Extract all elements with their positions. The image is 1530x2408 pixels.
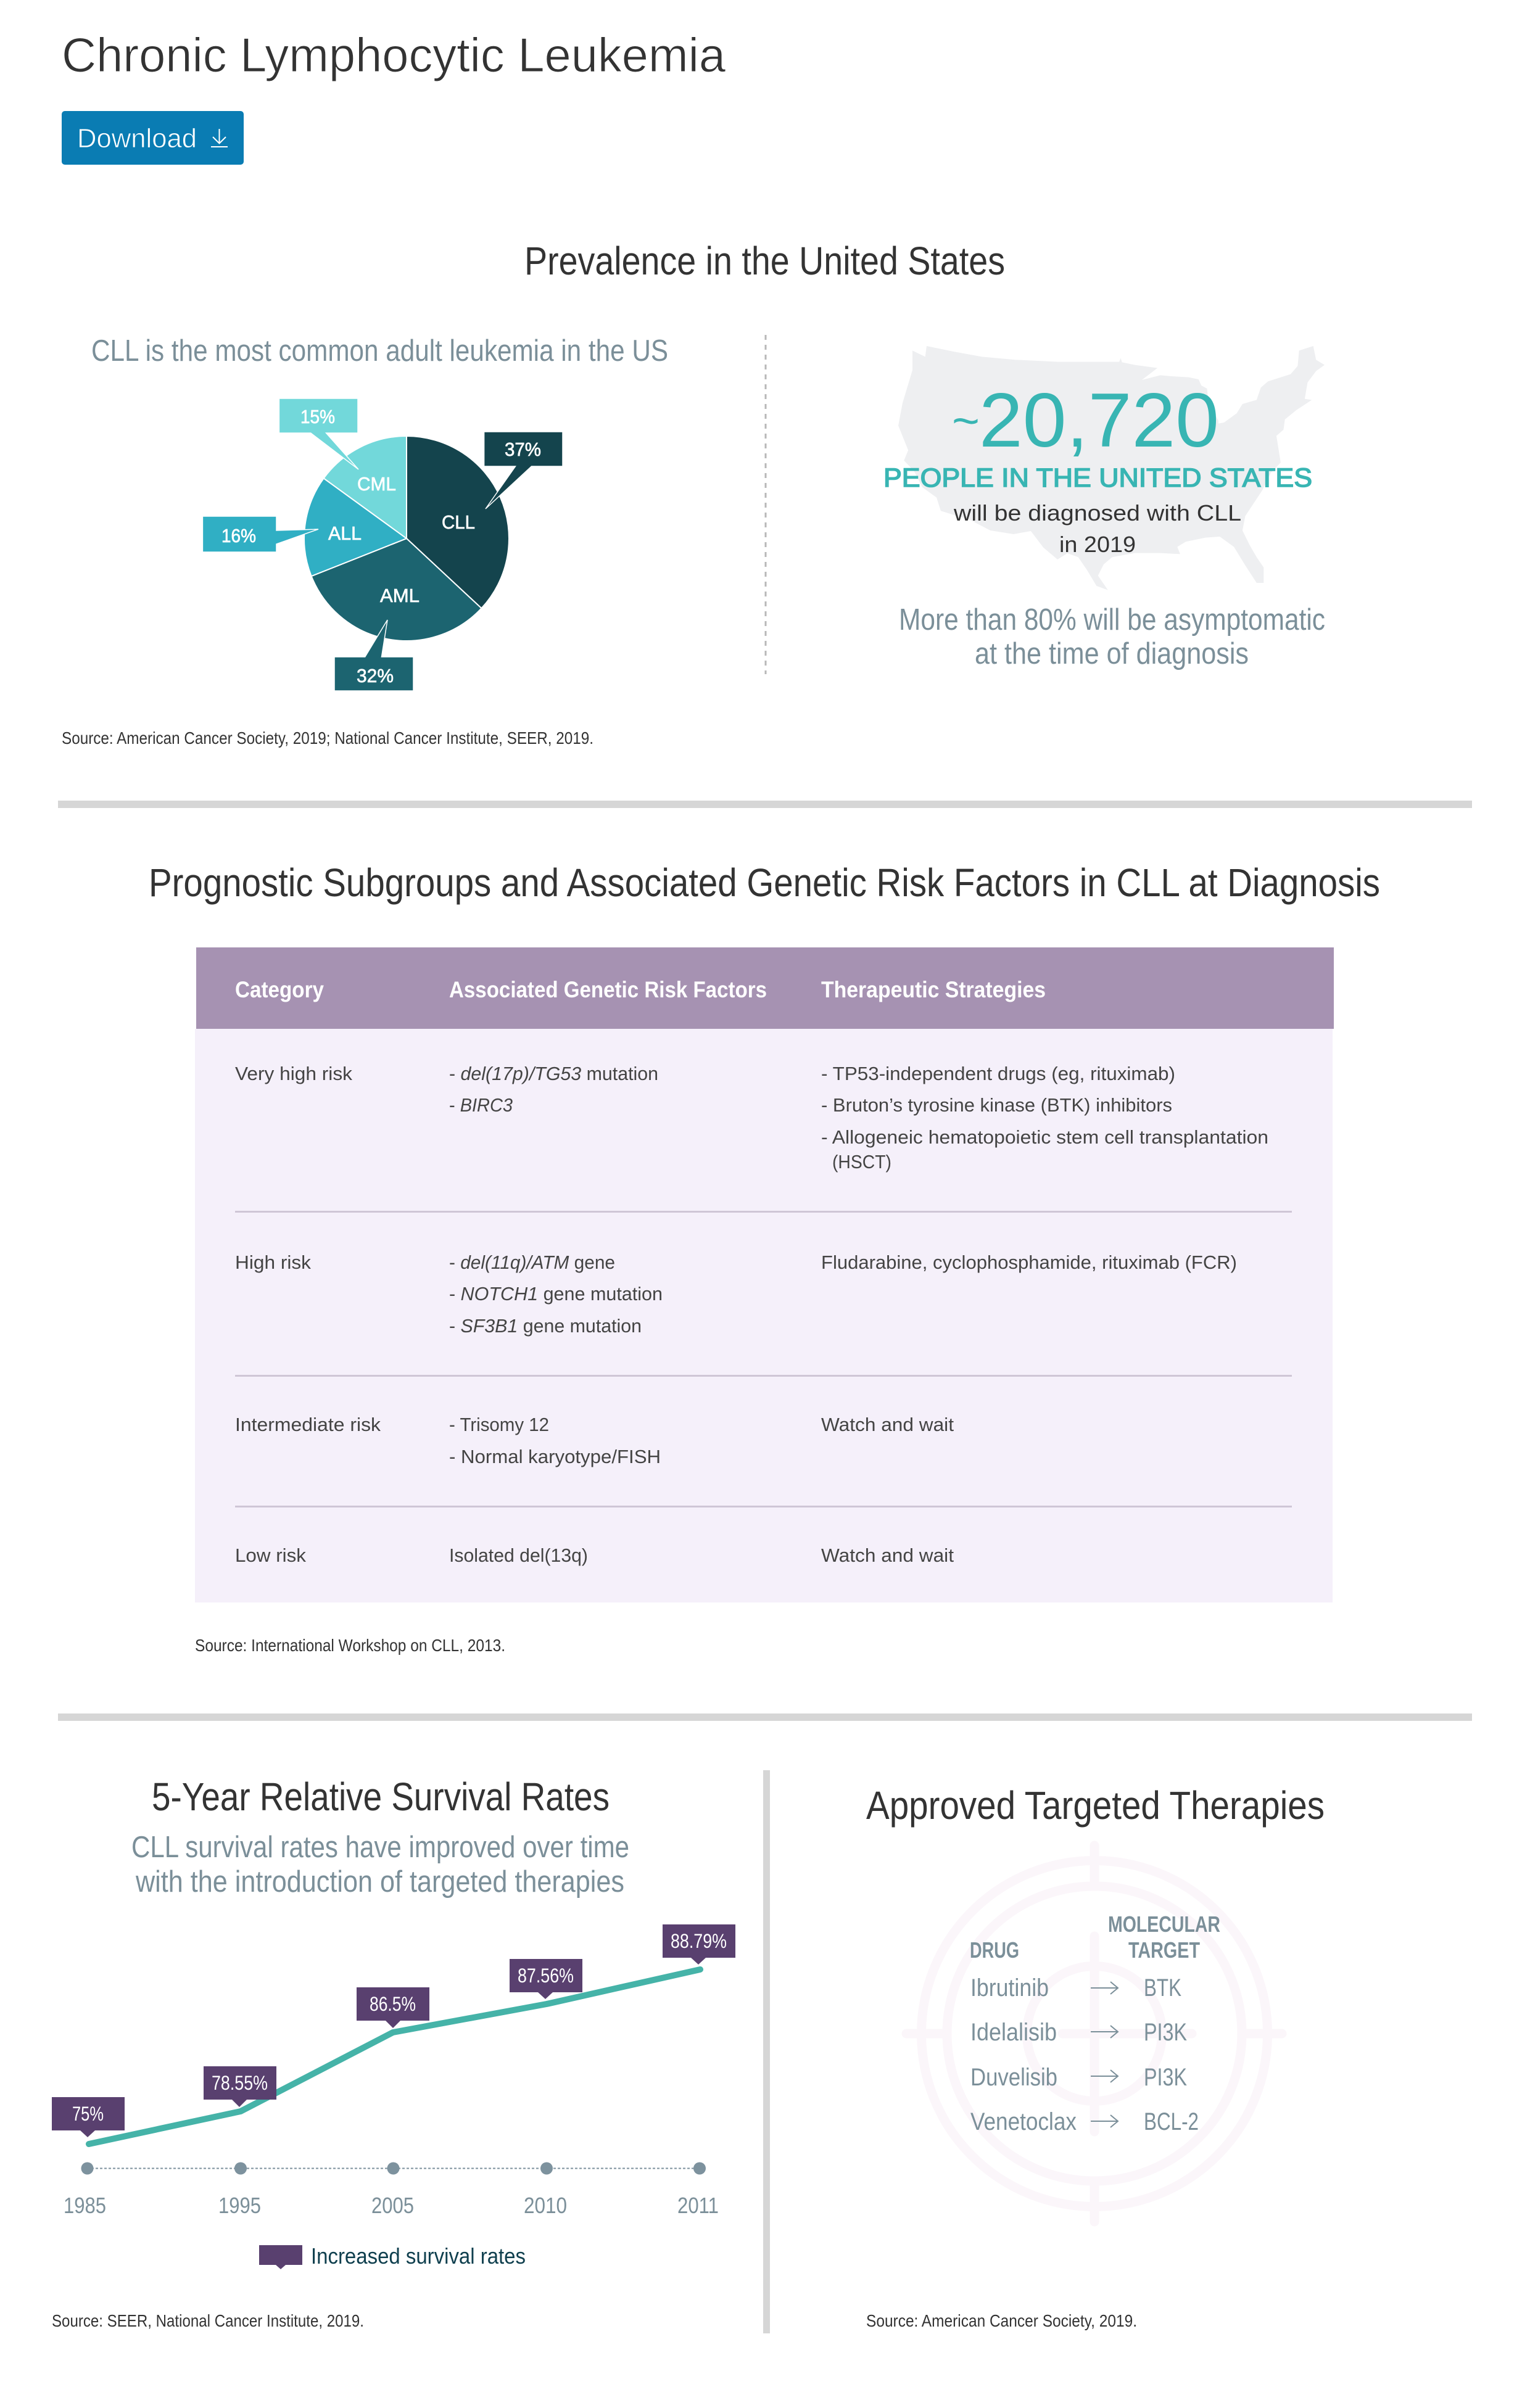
stat: number of people diagnosed: will be diagnosed with CLL bbox=[953, 500, 1241, 526]
subheading: most common leukemia: CLL is the most common adult leukemia in the US bbox=[91, 334, 668, 368]
subheading: survival improvement: CLL survival rates have improved over time bbox=[131, 1831, 629, 1864]
callout: ALL 16%: 16% bbox=[221, 525, 256, 546]
callout: 88.79% bbox=[663, 1924, 735, 1965]
callout: 75% bbox=[52, 2097, 125, 2137]
timeline axis: 2005 bbox=[371, 2193, 414, 2218]
table header: Associated Genetic Risk Factors bbox=[449, 977, 767, 1002]
pie chart: leukemia types: CLL bbox=[442, 511, 475, 533]
subheading: survival improvement bbox=[131, 1831, 629, 1899]
row: Duvelisib: Duvelisib bbox=[970, 2064, 1057, 2091]
survival trend line bbox=[89, 1969, 700, 2144]
row: high risk: - SF3B1 gene mutation bbox=[449, 1315, 642, 1337]
timeline axis: 1985 bbox=[64, 2193, 106, 2218]
heading: prevalence: Prevalence in the United States bbox=[524, 239, 1005, 283]
row: high risk: Fludarabine, cyclophosphamide, rituximab (FCR) bbox=[821, 1251, 1237, 1273]
row: Idelalisib: Idelalisib bbox=[970, 2019, 1057, 2046]
heading: survival rates: 5-Year Relative Survival Rates bbox=[152, 1775, 610, 1819]
row: Ibrutinib: BTK bbox=[1144, 1974, 1181, 2002]
table header: Therapeutic Strategies bbox=[821, 977, 1046, 1002]
callout text: asymptomatic bbox=[899, 603, 1325, 670]
table header: Category bbox=[235, 977, 324, 1002]
row: very high risk: (HSCT) bbox=[832, 1151, 891, 1173]
row: very high risk: - del(17p)/TG53 mutation bbox=[449, 1063, 658, 1084]
source: therapies: Source: American Cancer Society, 2019. bbox=[866, 2311, 1137, 2330]
callout text: asymptomatic: More than 80% will be asymptomatic bbox=[899, 603, 1325, 637]
row: very high risk: Very high risk bbox=[235, 1063, 353, 1084]
row: Ibrutinib: Ibrutinib bbox=[970, 1974, 1049, 2002]
legend: Increased survival rates bbox=[311, 2243, 526, 2269]
callout: 87.56% bbox=[510, 1959, 582, 1999]
heading: approved therapies: Approved Targeted Therapies bbox=[866, 1783, 1325, 1828]
row: very high risk: - Bruton’s tyrosine kinase (BTK) inhibitors bbox=[821, 1094, 1172, 1116]
timeline axis: 2010 bbox=[524, 2193, 567, 2218]
callout: CLL 37%: 37% bbox=[505, 439, 541, 460]
row: intermediate risk bbox=[235, 1414, 954, 1467]
callout: CML 15%: 15% bbox=[300, 406, 335, 427]
row: intermediate risk: - Trisomy 12 bbox=[449, 1414, 549, 1435]
row: Duvelisib: PI3K bbox=[1144, 2064, 1187, 2091]
row: very high risk bbox=[235, 1063, 1268, 1173]
row: high risk: High risk bbox=[235, 1251, 311, 1273]
stat: number of people diagnosed: 20,720 bbox=[979, 378, 1219, 463]
table: prognostic subgroups bbox=[195, 947, 1334, 1602]
row: intermediate risk: Intermediate risk bbox=[235, 1414, 381, 1435]
map: United States silhouette bbox=[898, 346, 1325, 590]
subheading: survival improvement: with the introduction of targeted therapies bbox=[135, 1865, 624, 1899]
icon: target background bbox=[906, 1845, 1282, 2222]
row: low risk: Low risk bbox=[235, 1544, 306, 1566]
row: low risk: Isolated del(13q) bbox=[449, 1544, 588, 1566]
row: Idelalisib: PI3K bbox=[1144, 2019, 1187, 2046]
source: survival: Source: SEER, National Cancer Institute, 2019. bbox=[52, 2311, 364, 2330]
pie chart: leukemia types: CML bbox=[357, 473, 396, 495]
row: Venetoclax bbox=[970, 2108, 1199, 2135]
row: very high risk: - Allogeneic hematopoietic stem cell transplantation bbox=[821, 1126, 1268, 1148]
table: drug targets: MOLECULAR bbox=[1108, 1911, 1220, 1937]
source: table: Source: International Workshop on CLL, 2013. bbox=[195, 1636, 505, 1655]
source: prevalence: Source: American Cancer Society, 2019; National Cancer Institute, SEER, 2019. bbox=[62, 728, 593, 748]
row: Venetoclax: Venetoclax bbox=[970, 2108, 1077, 2135]
callout: 78.55%: 78.55% bbox=[212, 2072, 268, 2094]
row: very high risk: - TP53-independent drugs (eg, rituximab) bbox=[821, 1063, 1175, 1084]
callout text: asymptomatic: at the time of diagnosis bbox=[975, 637, 1249, 670]
callout: ALL 16% bbox=[202, 516, 318, 552]
stat: number of people diagnosed: in 2019 bbox=[1059, 532, 1136, 557]
pie chart: leukemia types bbox=[202, 398, 563, 691]
row: high risk: - NOTCH1 gene mutation bbox=[449, 1283, 663, 1305]
download button bbox=[62, 111, 244, 165]
timeline axis: 2011 bbox=[677, 2193, 719, 2218]
download button: Download bbox=[77, 123, 197, 154]
row: low risk bbox=[235, 1544, 954, 1566]
callout: 88.79%: 88.79% bbox=[671, 1930, 727, 1952]
stat: number of people diagnosed bbox=[883, 378, 1312, 557]
row: low risk: Watch and wait bbox=[821, 1544, 954, 1566]
callout: AML 32%: 32% bbox=[357, 665, 394, 687]
row: intermediate risk: - Normal karyotype/FISH bbox=[449, 1446, 661, 1467]
title: Chronic Lymphocytic Leukemia bbox=[62, 28, 726, 82]
table: drug targets: DRUG bbox=[970, 1937, 1019, 1963]
stat: number of people diagnosed: ~ bbox=[952, 395, 980, 447]
callout: CLL 37% bbox=[484, 432, 563, 509]
table header bbox=[196, 947, 1334, 1029]
timeline axis: 1995 bbox=[218, 2193, 261, 2218]
callout: 87.56%: 87.56% bbox=[518, 1965, 574, 1987]
callout: 86.5%: 86.5% bbox=[370, 1993, 416, 2015]
table: drug targets: TARGET bbox=[1128, 1937, 1200, 1963]
row: high risk: - del(11q)/ATM gene bbox=[449, 1251, 615, 1273]
row: high risk bbox=[235, 1251, 1237, 1337]
callout: 78.55% bbox=[204, 2066, 276, 2107]
callout: 86.5% bbox=[357, 1987, 429, 2028]
row: intermediate risk: Watch and wait bbox=[821, 1414, 954, 1435]
line chart: survival rates bbox=[52, 1924, 735, 2218]
stat: number of people diagnosed: PEOPLE IN THE UNITED STATES bbox=[883, 463, 1312, 493]
pie chart: leukemia types: ALL bbox=[328, 522, 362, 544]
heading: prognostic subgroups: Prognostic Subgroups and Associated Genetic Risk Factors in CLL at Diagnosis bbox=[149, 860, 1380, 905]
table: drug targets bbox=[970, 1911, 1220, 2135]
row: Duvelisib bbox=[970, 2064, 1187, 2091]
pie chart: leukemia types: AML bbox=[380, 585, 420, 606]
row: very high risk: - BIRC3 bbox=[449, 1094, 513, 1116]
callout: CML 15% bbox=[279, 398, 358, 469]
row: Idelalisib bbox=[970, 2019, 1187, 2046]
callout: 75%: 75% bbox=[72, 2103, 104, 2125]
row: Ibrutinib bbox=[970, 1974, 1181, 2002]
timeline axis bbox=[64, 2163, 719, 2218]
row: Venetoclax: BCL-2 bbox=[1144, 2108, 1199, 2135]
callout: AML 32% bbox=[334, 620, 413, 691]
